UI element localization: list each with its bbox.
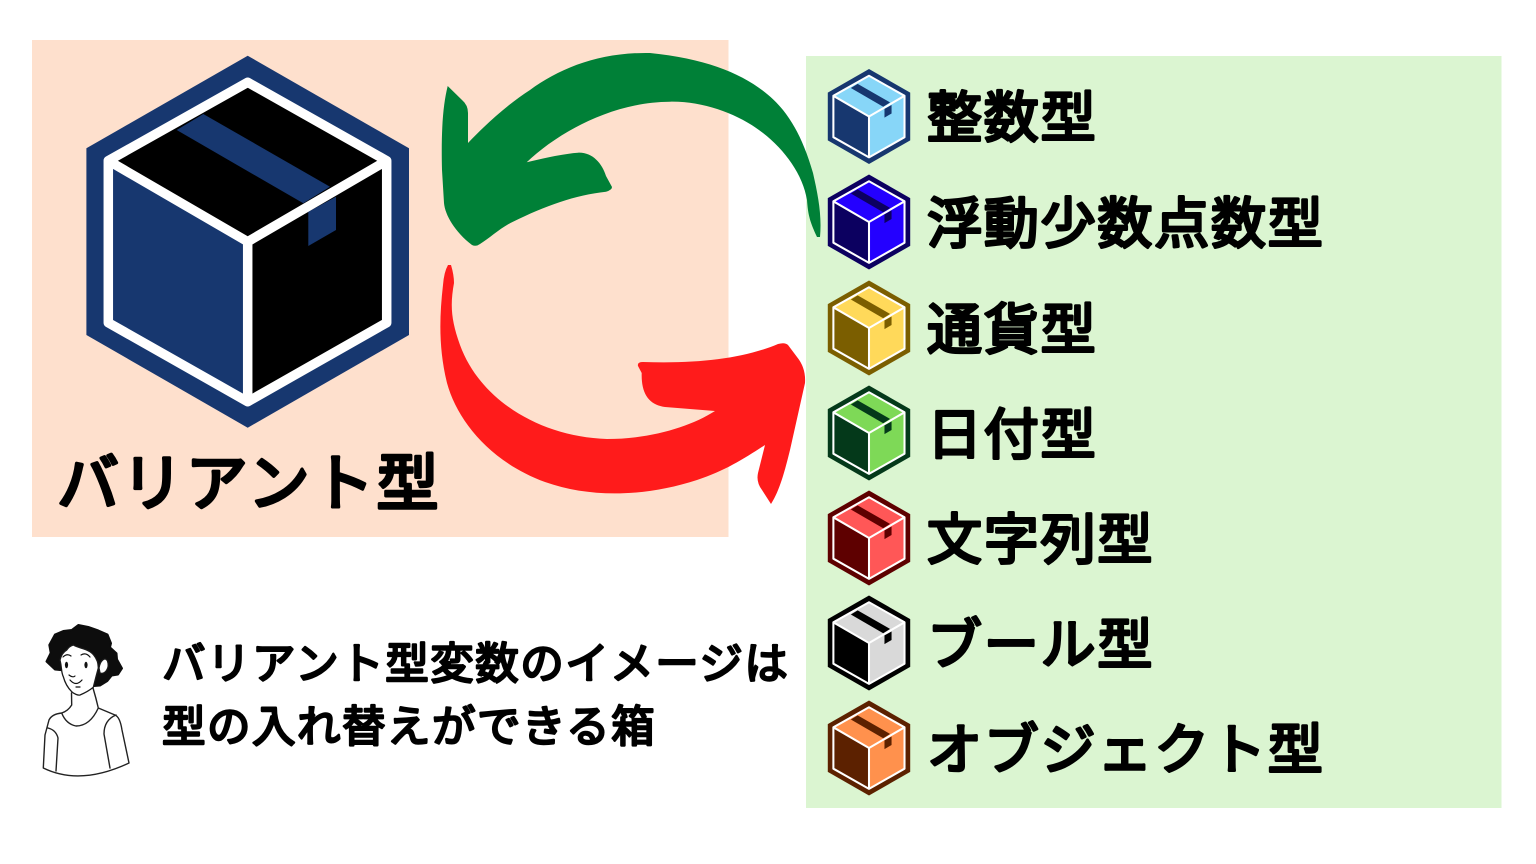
icon: integer box — [828, 69, 910, 164]
icon: date box — [828, 385, 910, 481]
text block: variant type explanation: バリアント型変数のイメージは — [162, 641, 789, 689]
heading: variant type: バリアント型 — [57, 450, 441, 519]
icon: boolean box — [828, 595, 910, 691]
arrow: red, from variant box to list — [440, 265, 805, 504]
text block: variant type explanation — [162, 641, 789, 752]
panel: data types list background — [806, 56, 1502, 808]
icon: string box — [828, 490, 910, 586]
icon: floating point box — [828, 174, 910, 270]
label: object type: オブジェクト型 — [927, 719, 1325, 781]
label: boolean type: ブール型 — [927, 614, 1154, 676]
label: floating point type: 浮動少数点数型 — [927, 193, 1325, 255]
label: currency type: 通貨型 — [927, 299, 1097, 361]
label: date type: 日付型 — [927, 404, 1097, 466]
icon: object box — [828, 700, 910, 796]
text block: variant type explanation: 型の入れ替えができる箱 — [162, 704, 656, 752]
icon: currency box — [828, 280, 910, 376]
icon: person illustration — [43, 625, 129, 776]
panel: variant type background — [32, 40, 728, 537]
icon: large variant box — [86, 56, 409, 428]
label: integer type: 整数型 — [927, 87, 1097, 149]
arrow: green, from list to variant box — [442, 53, 821, 246]
label: string type: 文字列型 — [927, 509, 1154, 571]
